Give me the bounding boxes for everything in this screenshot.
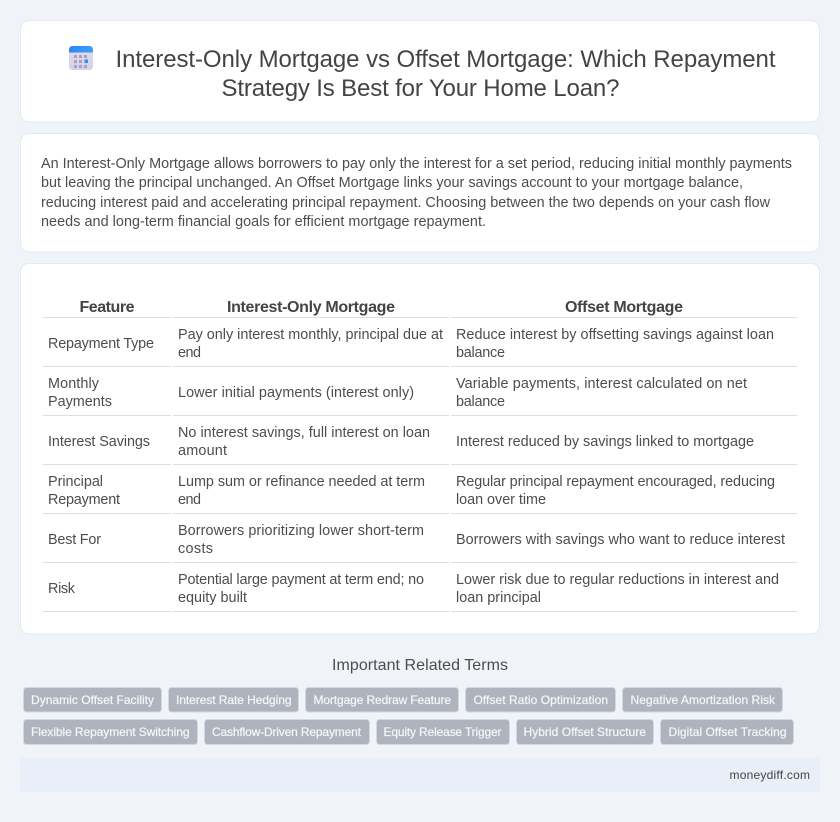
table header: Interest-Only Mortgage [227,299,395,316]
tag: Cashflow-Driven Repayment [212,725,362,739]
row: best for: Best For [48,532,101,548]
tag [306,688,458,712]
tag [622,688,782,712]
table header: Offset Mortgage [565,299,683,316]
tag [516,720,654,744]
row: monthly payments: Variable payments, interest calculated on net [456,376,747,392]
row: monthly payments: Payments [48,394,112,410]
tag: Mortgage Redraw Feature [314,693,451,707]
row: principal repayment: loan over time [456,492,546,508]
tag: Interest Rate Hedging [176,693,292,707]
row: repayment type: Reduce interest by offsetting savings against loan [456,327,774,343]
row: monthly payments: Lower initial payments (interest only) [178,385,414,401]
row: interest savings [43,425,797,465]
row: principal repayment: Principal [48,474,103,490]
row: risk: Potential large payment at term end; no [178,572,424,588]
title: Strategy Is Best for Your Home Loan? [222,75,620,102]
tag: Hybrid Offset Structure [524,725,646,739]
row: risk: loan principal [456,590,541,606]
row: interest savings: No interest savings, full interest on loan [178,425,430,441]
tag [24,688,162,712]
title [116,46,776,102]
tag [204,720,370,744]
footer [20,758,820,792]
row: principal repayment: Regular principal repayment encouraged, reducing [456,474,775,490]
tag [466,688,616,712]
text block: introduction: needs and long-term financial goals for efficient mortgage repayment. [41,214,486,230]
table header: Feature [80,299,135,316]
tag: Equity Release Trigger [384,725,502,739]
title: Interest-Only Mortgage vs Offset Mortgage: Which Repayment [116,46,776,73]
row: risk [43,572,797,612]
text block: introduction [41,156,792,230]
row: best for: costs [178,541,213,557]
tag: Offset Ratio Optimization [474,693,608,707]
row: principal repayment: end [178,492,201,508]
row: interest savings: Interest Savings [48,434,150,450]
row: best for [43,523,797,563]
row: repayment type: Repayment Type [48,336,154,352]
row: best for: Borrowers with savings who want to reduce interest [456,532,785,548]
row: principal repayment [43,474,797,514]
tag [24,720,198,744]
row: principal repayment: Lump sum or refinance needed at term [178,474,425,490]
row: repayment type [43,327,797,367]
row: risk: Risk [48,581,76,597]
row: risk: Lower risk due to regular reductions in interest and [456,572,779,588]
row: monthly payments: balance [456,394,505,410]
tag [660,720,794,744]
row: best for: Borrowers prioritizing lower short-term [178,523,424,539]
panel: introduction [20,134,820,252]
tag: Flexible Repayment Switching [31,725,190,739]
row: interest savings: Interest reduced by savings linked to mortgage [456,434,754,450]
row: repayment type: balance [456,345,505,361]
row: repayment type: Pay only interest monthly, principal due at [178,327,443,343]
row: risk: equity built [178,590,247,606]
text block: introduction: but leaving the principal unchanged. An Offset Mortgage links your savings account to your mortgage balance, [41,175,743,191]
footer: moneydiff.com [730,768,810,782]
row: monthly payments: Monthly [48,376,100,392]
heading: related terms: Important Related Terms [332,657,508,674]
row: repayment type: end [178,345,201,361]
row: interest savings: amount [178,443,227,459]
tag: Negative Amortization Risk [630,693,776,707]
text block: introduction: reducing interest paid and accelerating principal repayment. Choosing between the two depends on your cash flow [41,195,771,211]
tag: Digital Offset Tracking [668,725,786,739]
icon: calendar [69,46,93,70]
text block: introduction: An Interest-Only Mortgage allows borrowers to pay only the interest for a set period, reducing initial monthly payments [41,156,792,172]
table header [43,299,797,318]
row: monthly payments [43,376,797,416]
panel: comparison table [20,264,820,634]
tag: Dynamic Offset Facility [31,693,154,707]
panel: header [20,20,820,122]
tag [168,688,298,712]
tags: related terms [24,688,794,744]
row: principal repayment: Repayment [48,492,120,508]
tag [376,720,510,744]
